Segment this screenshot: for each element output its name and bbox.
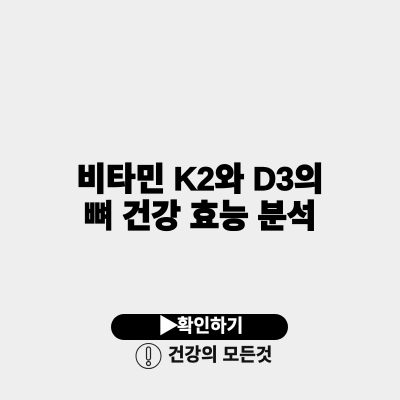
title <box>77 161 323 234</box>
button label: ▶확인하기 <box>158 315 243 338</box>
button: confirm <box>111 314 288 340</box>
brand name: 건강의 모든것 <box>168 345 272 365</box>
footer brand <box>136 343 272 369</box>
title: 뼈 건강 효능 분석 <box>84 198 316 234</box>
icon: exclamation circle <box>136 343 162 369</box>
title: 비타민 K2와 D3의 <box>77 161 323 197</box>
